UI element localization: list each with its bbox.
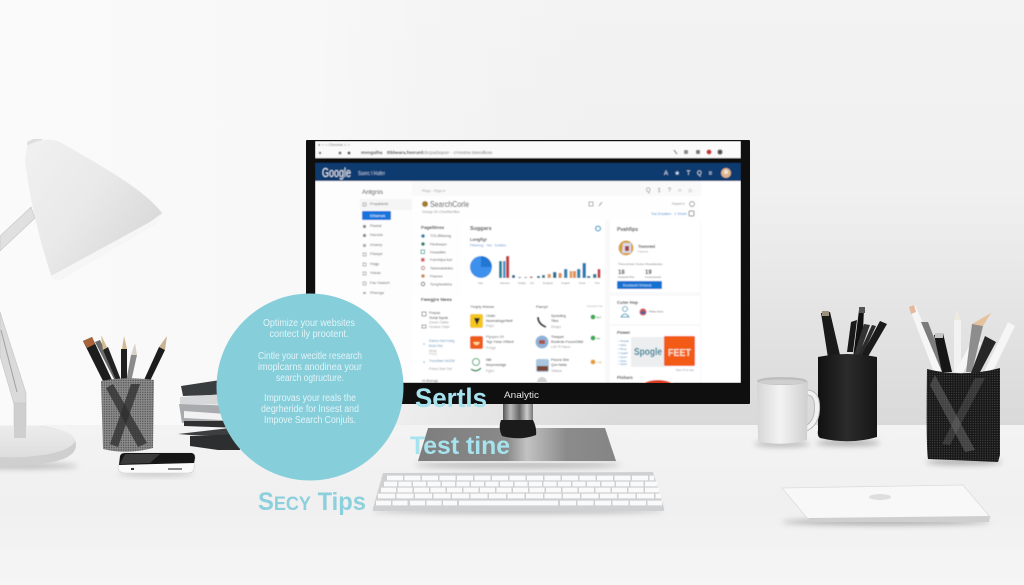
- sidebar: Hagp: [370, 262, 379, 266]
- profile card: 19: [645, 270, 652, 276]
- power card: • Lagsh: [618, 351, 628, 355]
- pens: [821, 307, 887, 360]
- profile card: Thouverlulet Vcctue Rotoaliardep: [618, 262, 663, 266]
- bezel label: Analytic: [504, 390, 539, 401]
- power card: Spogle: [634, 347, 662, 358]
- recent text and badges: Rontrrdn-Fonorl29ldl: [551, 340, 583, 344]
- profile card: Nuatelid Ptlw: [618, 275, 635, 279]
- left pencil cup: [83, 335, 167, 452]
- page links list: Tovrg/kwaletra: [430, 282, 452, 286]
- left news items: [422, 311, 455, 383]
- google header: [315, 163, 741, 181]
- page links list: Pagelitnos: [421, 225, 445, 230]
- chart axis labels: Endpyle: [543, 281, 554, 285]
- trending text: Pvhge: [486, 346, 496, 350]
- recent text and badges: SM: [596, 336, 601, 340]
- news section: Fwegjre Nees: [421, 297, 452, 303]
- left news items: Gwotz Clatbe: [429, 320, 449, 324]
- stand neck: [503, 403, 533, 429]
- page links list: Fresadilter: [430, 250, 447, 254]
- tips circle: [216, 294, 404, 480]
- chart axis labels: Flrs: [595, 281, 600, 285]
- monitor: [306, 140, 750, 404]
- news section: Thujrly Nhewe: [470, 305, 494, 309]
- recent text and badges: Tafiave: [551, 369, 562, 373]
- recent text and badges: Spoeding: [551, 314, 566, 318]
- left news items: Grutase Oster: [429, 325, 451, 329]
- tip three: [261, 393, 359, 426]
- recent text and badges: YTR: [596, 360, 602, 364]
- power card: • Tplot: [618, 359, 627, 363]
- chart axis labels: Aap: [478, 281, 483, 285]
- lamp base: [0, 426, 78, 469]
- sidebar: Pharxge: [370, 291, 384, 295]
- red semicircle: [642, 379, 674, 383]
- chart axis labels: Anglett: [561, 281, 570, 285]
- browser bar: Bbbeara.foorurd: [387, 150, 423, 155]
- sidebar: Elitamas: [370, 213, 385, 218]
- black pen holder: [816, 307, 887, 446]
- browser bar: ● ○ ○ Chrome ⌂ ○: [318, 142, 350, 147]
- profile card: Inuulocietudt: [645, 275, 661, 279]
- recent text and badges: Dhayo: [551, 325, 561, 329]
- sidebar: [360, 189, 412, 296]
- power card: Rwrt Of & rlwe: [676, 368, 694, 372]
- recent text and badges: SET: [596, 316, 602, 320]
- lamp shade: [25, 139, 162, 280]
- holder shadow: [926, 459, 1002, 465]
- heading: Sertls: Sertls: [415, 383, 487, 413]
- coffee mug: [754, 377, 817, 447]
- pie chart: [470, 256, 492, 278]
- power card: • Cpyh: [618, 355, 627, 359]
- stand shadow: [415, 461, 621, 469]
- tip one: [263, 318, 355, 340]
- stack of books: [178, 377, 240, 450]
- google header: Saerc I Hafer: [358, 171, 385, 177]
- tip two: Cintle your wecitle research: [258, 351, 362, 362]
- page links list: Plestnsqon: [430, 242, 447, 246]
- power card: • Ploto: [618, 347, 627, 351]
- tip one: contect ily prootent.: [270, 329, 348, 340]
- chart card: Pifebeog · Yes · Eoldtes: [470, 244, 506, 248]
- search console title: Group Or Chortherfles: [422, 210, 460, 214]
- chart axis labels: [478, 282, 600, 285]
- main content area: [420, 186, 696, 383]
- sidebar: Fropalards: [370, 202, 388, 206]
- heading: Secy Tips: SECY Tips: [258, 488, 366, 516]
- infographic scene: [0, 139, 1024, 529]
- left news items: Pvhus Sets Tlef: [429, 367, 452, 371]
- news section: Paecpt: [536, 305, 549, 309]
- left news items: Fluns: [429, 352, 437, 356]
- pencils: [83, 335, 167, 382]
- search console title: [422, 199, 694, 216]
- keyboard: [372, 472, 664, 514]
- screen: [315, 141, 741, 404]
- tip three: degrheride for lnsest and: [261, 404, 359, 415]
- trending icons: [470, 314, 483, 371]
- page links list: Fnerrbitpa·fuet: [430, 258, 452, 262]
- power card: • Tenpal: [618, 339, 629, 343]
- contact card: Cuter Hep: [617, 300, 638, 305]
- sidebar: Hacolar: [370, 233, 384, 237]
- trending text: Ctoter: [486, 314, 496, 318]
- page links list: Fhaonnr: [430, 274, 443, 278]
- phone: [118, 453, 195, 476]
- main content area: Pleyc · Fiyyc ▾: [422, 189, 445, 193]
- recent icons: [536, 317, 549, 387]
- power card: Pisbars: [617, 375, 633, 380]
- left news items: Fhepaa: [429, 311, 440, 315]
- main content area: Q ‡ ? ○ ⌂: [646, 188, 692, 194]
- background wall: [0, 0, 1024, 426]
- tip two: [258, 351, 363, 384]
- left news items: Brub Hbs: [429, 344, 443, 348]
- left news items: Tncurflare NcS39: [429, 359, 455, 363]
- news section: [420, 297, 602, 383]
- monitor bezel: [306, 140, 750, 404]
- contact card: Fhee mnrc: [649, 310, 664, 314]
- search console title: Tue Ersalten · 1 Shom: [651, 212, 687, 216]
- lamp arm: [0, 207, 35, 438]
- trending text: [486, 314, 514, 373]
- sidebar: Ftlaepe: [370, 252, 383, 256]
- chart axis labels: Hannter: [500, 281, 510, 285]
- page links list: [420, 225, 454, 287]
- trending text: Tigs Ylxse VNfenf: [486, 340, 514, 344]
- recent text and badges: Ttlvs: [551, 319, 559, 323]
- feet tile: [664, 336, 695, 366]
- trending text: Fglrd: [486, 369, 494, 373]
- left news items: Tichal Sqonk: [429, 316, 448, 320]
- desk surface: [0, 425, 1024, 585]
- recent text and badges: Anyanty Inte: [587, 304, 603, 308]
- google header: Google: [322, 166, 351, 180]
- logo tile: [631, 337, 665, 367]
- browser bar: mvogalha: [361, 150, 383, 155]
- trending text: Nonmafragn/Nelf: [486, 319, 512, 323]
- sidebar: Hnarey: [370, 243, 382, 247]
- tip two: search ogtructure.: [276, 373, 344, 384]
- browser bar: [318, 142, 724, 156]
- power card: FEET: [668, 347, 691, 359]
- chart axis labels: Sct: [530, 281, 534, 285]
- profile card: Pvahfips: [617, 227, 638, 233]
- trending text: Inoyrnedolge: [486, 363, 506, 367]
- power card: • Cptro: [618, 362, 628, 366]
- sidebar: Fav Hadurh: [370, 281, 390, 285]
- mesh holder: [927, 368, 1000, 462]
- tip three: Impove Search Conjuls.: [264, 415, 356, 426]
- recent text and badges: Thequet: [551, 335, 564, 339]
- heading: Test tine: Test tine: [410, 432, 510, 460]
- black mesh pen holder: [909, 305, 1015, 465]
- sidebar: Plastar: [370, 224, 383, 228]
- stand base: [418, 428, 616, 461]
- recent text and badges: LAT Pi Nanv: [551, 345, 571, 349]
- page links list: Tartomatellutes: [430, 266, 453, 270]
- sidebar: Antgnis: [362, 189, 383, 196]
- power card: [616, 330, 696, 383]
- mesh cup: [101, 378, 154, 452]
- bar chart: [499, 256, 600, 278]
- profile card: [616, 226, 662, 290]
- browser bar: cbcpadsquer · cHootne.tsiendloxe: [423, 150, 493, 155]
- profile card: Tovorevi: [638, 244, 655, 249]
- google header: A ★ T Q ≡: [664, 170, 712, 177]
- sidebar: Vdeas: [370, 271, 381, 275]
- power card: Power: [617, 330, 630, 335]
- left news items: Hi Altoruge: [422, 379, 438, 383]
- contact card: [616, 300, 664, 318]
- recent text and badges: Psxcra Stre: [551, 358, 569, 362]
- trending text: Ntlt: [486, 358, 491, 362]
- profile card: Fanoee: [638, 250, 649, 254]
- page links list: TOL/Bitseog: [430, 234, 451, 238]
- tip two: imoplcarns anodinea your: [258, 362, 363, 373]
- chart card: Suggars: [470, 226, 492, 232]
- trending text: Plyopeo IXt: [486, 335, 504, 339]
- tip one: Optimize your websites: [263, 318, 355, 329]
- chart card: [470, 225, 602, 284]
- recent text and badges: [551, 304, 603, 373]
- monitor stand: [415, 403, 621, 469]
- profile card: 18: [618, 270, 625, 276]
- left news items: Eteres Hnd Hotrg: [429, 339, 455, 343]
- active nav item: [362, 211, 391, 220]
- holder shadow: [816, 440, 880, 446]
- recent text and badges: Qvn·Nelta: [551, 363, 567, 367]
- search console title: Fenert ▾: [672, 202, 685, 206]
- power card: • Inkto: [618, 343, 627, 347]
- desk lamp: [0, 139, 162, 469]
- search console title: SearchCorle: [430, 199, 469, 209]
- white pens: [909, 305, 1015, 374]
- profile button: [617, 281, 662, 289]
- chart axis labels: Sctllgt: [518, 281, 526, 285]
- chart axis labels: Dmle: [579, 281, 586, 285]
- trending text: Fhpo: [486, 324, 494, 328]
- tablet: [782, 485, 990, 525]
- chart card: Longfigr: [470, 237, 487, 242]
- stand foot: [500, 420, 536, 438]
- tip three: Improvas your reals the: [264, 393, 356, 404]
- left news items: Hnus: [429, 349, 437, 353]
- profile card: Boustauint Shrianok: [623, 284, 652, 288]
- holder body: [818, 354, 877, 441]
